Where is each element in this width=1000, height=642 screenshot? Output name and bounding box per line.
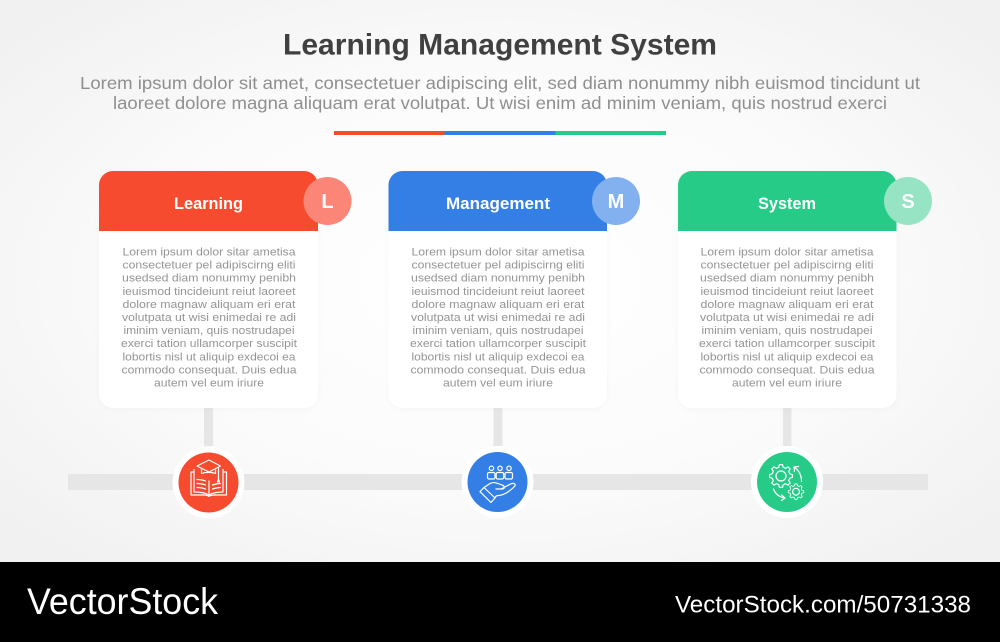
body text: dolore magnaw aliquam eri erat <box>700 299 874 311</box>
body text: volutpata ut wisi enimedai re adi <box>700 312 874 324</box>
body text: commodo consequat. Duis edua <box>410 364 586 376</box>
body text: ieuismod tincideiunt reiut laoreet <box>122 286 296 298</box>
body text: volutpata ut wisi enimedai re adi <box>122 312 296 324</box>
card body <box>99 171 318 408</box>
body text: commodo consequat. Duis edua <box>700 364 875 376</box>
body text: consectetuer pel adipiscirng eliti <box>122 260 296 272</box>
title: Learning Management System <box>283 28 717 62</box>
card header <box>678 171 896 231</box>
card body <box>388 171 607 408</box>
timeline bar <box>68 474 928 490</box>
body text: lobortis nisl ut aliquip exdecoi ea <box>700 351 874 363</box>
connector: system <box>783 408 792 446</box>
body text: exerci tation ullamcorper suscipit <box>410 338 587 350</box>
body text: autem vel eum iriure <box>443 378 553 390</box>
body text: Lorem ipsum dolor sitar ametisa <box>412 246 585 258</box>
footer logo: VectorStock <box>27 581 218 622</box>
panel: system <box>678 171 932 408</box>
body text: dolore magnaw aliquam eri erat <box>122 299 296 311</box>
body text: exerci tation ullamcorper suscipit <box>699 338 876 350</box>
letter badge <box>304 177 352 225</box>
body text: consectetuer pel adipiscirng eliti <box>700 260 874 272</box>
body text <box>410 246 587 390</box>
tricolor divider <box>334 131 666 135</box>
card body <box>678 171 896 408</box>
icon: gears with rotating arrows <box>751 446 823 518</box>
body text: dolore magnaw aliquam eri erat <box>412 299 585 311</box>
subtitle text: Lorem ipsum dolor sit amet, consectetuer adipiscing elit, sed diam nonummy nibh euismod tincidunt ut <box>80 73 920 93</box>
body text: lobortis nisl ut aliquip exdecoi ea <box>412 351 585 363</box>
body text: iminim veniam, quis nostrudapei <box>412 325 584 337</box>
connector: management <box>494 408 502 446</box>
card header <box>99 171 318 231</box>
body text: usedsed diam nonummy penibh <box>411 273 585 285</box>
panel: management <box>388 171 640 408</box>
body text: iminim veniam, quis nostrudapei <box>124 325 294 337</box>
connector: learning <box>204 408 213 446</box>
body text: Lorem ipsum dolor sitar ametisa <box>122 246 296 258</box>
body text <box>699 246 876 390</box>
card header <box>388 171 607 231</box>
body text: ieuismod tincideiunt reiut laoreet <box>412 286 585 298</box>
letter badge: L <box>321 191 334 213</box>
letter badge: M <box>608 191 624 213</box>
body text: lobortis nisl ut aliquip exdecoi ea <box>122 351 296 363</box>
icon: graduation cap on open book <box>172 446 244 518</box>
body text: autem vel eum iriure <box>732 378 842 390</box>
body text: exerci tation ullamcorper suscipit <box>121 338 298 350</box>
panel: learning <box>99 171 352 408</box>
footer image id: VectorStock.com/50731338 <box>675 592 971 618</box>
heading: Learning <box>174 194 243 213</box>
letter badge: S <box>901 191 915 213</box>
body text: usedsed diam nonummy penibh <box>700 273 874 285</box>
body text: iminim veniam, quis nostrudapei <box>702 325 872 337</box>
subtitle text: laoreet dolore magna aliquam erat volutpat. Ut wisi enim ad minim veniam, quis nostrud exerci <box>113 93 887 113</box>
body text: Lorem ipsum dolor sitar ametisa <box>700 246 874 258</box>
subtitle text <box>80 73 920 113</box>
body text: volutpata ut wisi enimedai re adi <box>411 312 585 324</box>
footer band <box>0 562 1000 642</box>
body text <box>121 246 298 390</box>
heading: Management <box>446 194 550 213</box>
icon: hand holding people <box>462 446 534 518</box>
body text: consectetuer pel adipiscirng eliti <box>412 260 584 272</box>
body text: autem vel eum iriure <box>154 378 264 390</box>
letter badge <box>592 177 640 225</box>
letter badge <box>884 177 932 225</box>
body text: ieuismod tincideiunt reiut laoreet <box>700 286 874 298</box>
body text: commodo consequat. Duis edua <box>122 364 297 376</box>
body text: usedsed diam nonummy penibh <box>122 273 296 285</box>
heading: System <box>758 194 816 213</box>
